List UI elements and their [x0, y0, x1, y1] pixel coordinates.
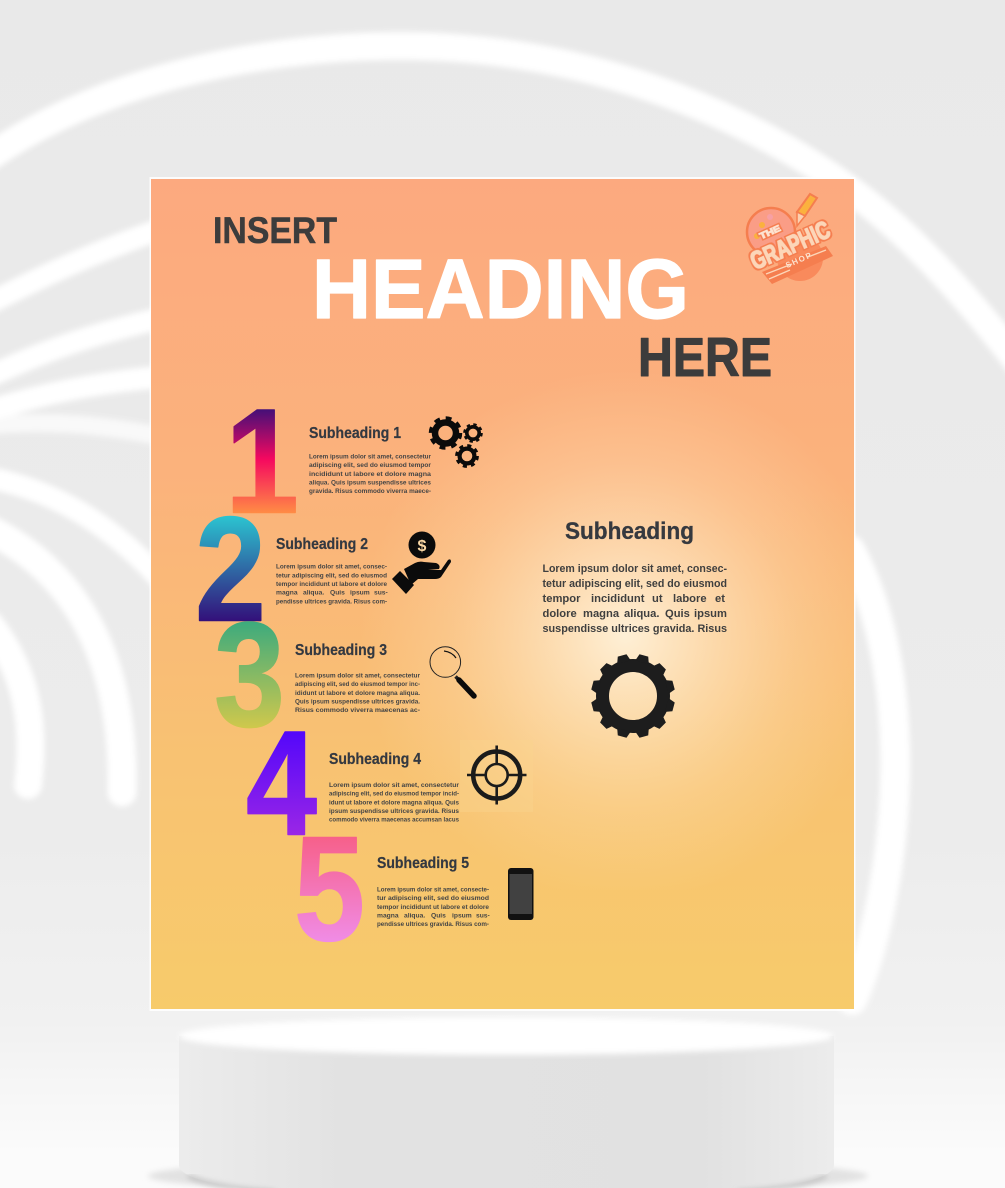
- body text 2: Lorem ipsum dolor sit amet, consec-: [276, 564, 387, 571]
- podium: [148, 1017, 868, 1188]
- body text 5: Quis: [431, 912, 446, 919]
- body text 5: tempor incididunt ut labore et dolore: [377, 904, 489, 911]
- main body text: ut: [652, 593, 663, 605]
- body text 2: sus-: [374, 590, 388, 597]
- body text 1: incididunt ut labore et dolore magna: [309, 471, 431, 478]
- body text 5: sus-: [476, 912, 490, 919]
- body text 1: [309, 454, 431, 495]
- body text 3: Risus commodo viverra maecenas ac-: [295, 707, 420, 714]
- body text 5: tur adipiscing elit, sed do eiusmod: [377, 895, 489, 902]
- item 1: [225, 378, 481, 544]
- number 2: 2: [195, 486, 266, 652]
- body text 1: Lorem ipsum dolor sit amet, consectetur: [309, 454, 431, 460]
- icon: smartphone: [508, 868, 534, 920]
- body text 2: magna: [276, 590, 298, 597]
- number 3: 3: [214, 591, 285, 758]
- body text 2: tetur adipiscing elit, sed do eiusmod: [276, 572, 387, 579]
- main body text: magna: [583, 608, 620, 620]
- body text 5: ipsum: [452, 912, 472, 919]
- body text 3: [295, 672, 420, 714]
- title: HERE: [638, 326, 772, 388]
- subheading 3: Subheading 3: [295, 642, 387, 659]
- main body text: incididunt: [591, 593, 645, 605]
- item 2: [195, 486, 451, 652]
- body text 5: [377, 886, 490, 928]
- main body text: aliqua.: [624, 608, 659, 620]
- body text 5: Lorem ipsum dolor sit amet, consecte-: [377, 886, 489, 894]
- poster panel: [150, 177, 856, 1011]
- main body text: ipsum: [694, 608, 727, 620]
- body text 2: Quis: [330, 590, 345, 597]
- body text 1: gravida. Risus commodo viverra maece-: [309, 488, 431, 495]
- subheading 5: Subheading 5: [377, 855, 469, 872]
- body text 3: Quis ipsum suspendisse ultrices gravida.: [295, 698, 420, 705]
- logo: The Graphic Shop: GRAPHIC: [746, 216, 834, 276]
- icon: gears: [431, 418, 481, 466]
- logo: The Graphic Shop: SHOP: [784, 251, 813, 270]
- main body text: et: [715, 593, 725, 605]
- main body text: dolore: [542, 608, 577, 620]
- number 1: 1: [225, 378, 299, 544]
- body text 4: [329, 782, 459, 824]
- main subheading: Subheading: [565, 518, 694, 545]
- body text 4: Lorem ipsum dolor sit amet, consectetur: [329, 782, 459, 789]
- body text 3: ididunt ut labore et dolore magna aliqua.: [295, 690, 420, 697]
- main body text: Quis: [665, 608, 690, 620]
- subheading 2: Subheading 2: [276, 536, 368, 553]
- main body text: tetur adipiscing elit, sed do eiusmod: [542, 578, 727, 590]
- number 5: 5: [294, 805, 365, 972]
- main body text: tempor: [542, 593, 581, 605]
- body text 4: commodo viverra maecenas accumsan lacus: [329, 816, 459, 824]
- item 3: [214, 591, 474, 758]
- body text 2: tempor incididunt ut labore et dolore: [276, 581, 387, 588]
- title: [213, 209, 772, 388]
- body text 5: pendisse ultrices gravida. Risus com-: [377, 921, 489, 928]
- body text 2: aliqua.: [303, 590, 324, 597]
- item 5: [294, 805, 534, 972]
- body text 2: [276, 564, 388, 605]
- body text 4: idunt ut labore et dolore magna aliqua. Quis: [329, 799, 459, 806]
- body text 3: Lorem ipsum dolor sit amet, consectetur: [295, 672, 420, 680]
- main body text: Lorem ipsum dolor sit amet, consec-: [542, 563, 727, 575]
- body text 3: adipiscing elit, sed do eiusmod tempor inc-: [295, 681, 420, 688]
- body text 5: aliqua.: [404, 912, 425, 919]
- main body text: labore: [673, 593, 707, 605]
- body text 4: adipiscing elit, sed do eiusmod tempor incid-: [329, 791, 459, 798]
- icon: hand holding coin: [392, 532, 451, 594]
- icon: target: [460, 740, 533, 812]
- main body text: [542, 563, 727, 635]
- logo: The Graphic Shop: [741, 194, 837, 284]
- body text 1: aliqua. Quis ipsum suspendisse ultrices: [309, 480, 431, 486]
- number 4: 4: [246, 700, 317, 866]
- title: HEADING: [312, 242, 689, 336]
- item 4: [246, 700, 533, 866]
- main panel: subheading with body and gear: [542, 518, 727, 738]
- subheading 4: Subheading 4: [329, 751, 421, 768]
- main body text: suspendisse ultrices gravida. Risus: [542, 623, 727, 635]
- icon: large gear: [591, 654, 675, 738]
- icon: hand holding coin: $: [418, 538, 427, 555]
- subheading 1: Subheading 1: [309, 425, 401, 442]
- icon: magnifying glass: [430, 647, 474, 696]
- logo: The Graphic Shop: THE: [758, 223, 782, 241]
- body text 2: ipsum: [350, 590, 370, 597]
- title: INSERT: [213, 209, 337, 251]
- body text 1: adipiscing elit, sed do eiusmod tempor: [309, 462, 431, 469]
- body text 2: pendisse ultrices gravida. Risus com-: [276, 598, 387, 605]
- body text 5: magna: [377, 912, 399, 919]
- body text 4: ipsum suspendisse ultrices gravida. Risus: [329, 808, 459, 815]
